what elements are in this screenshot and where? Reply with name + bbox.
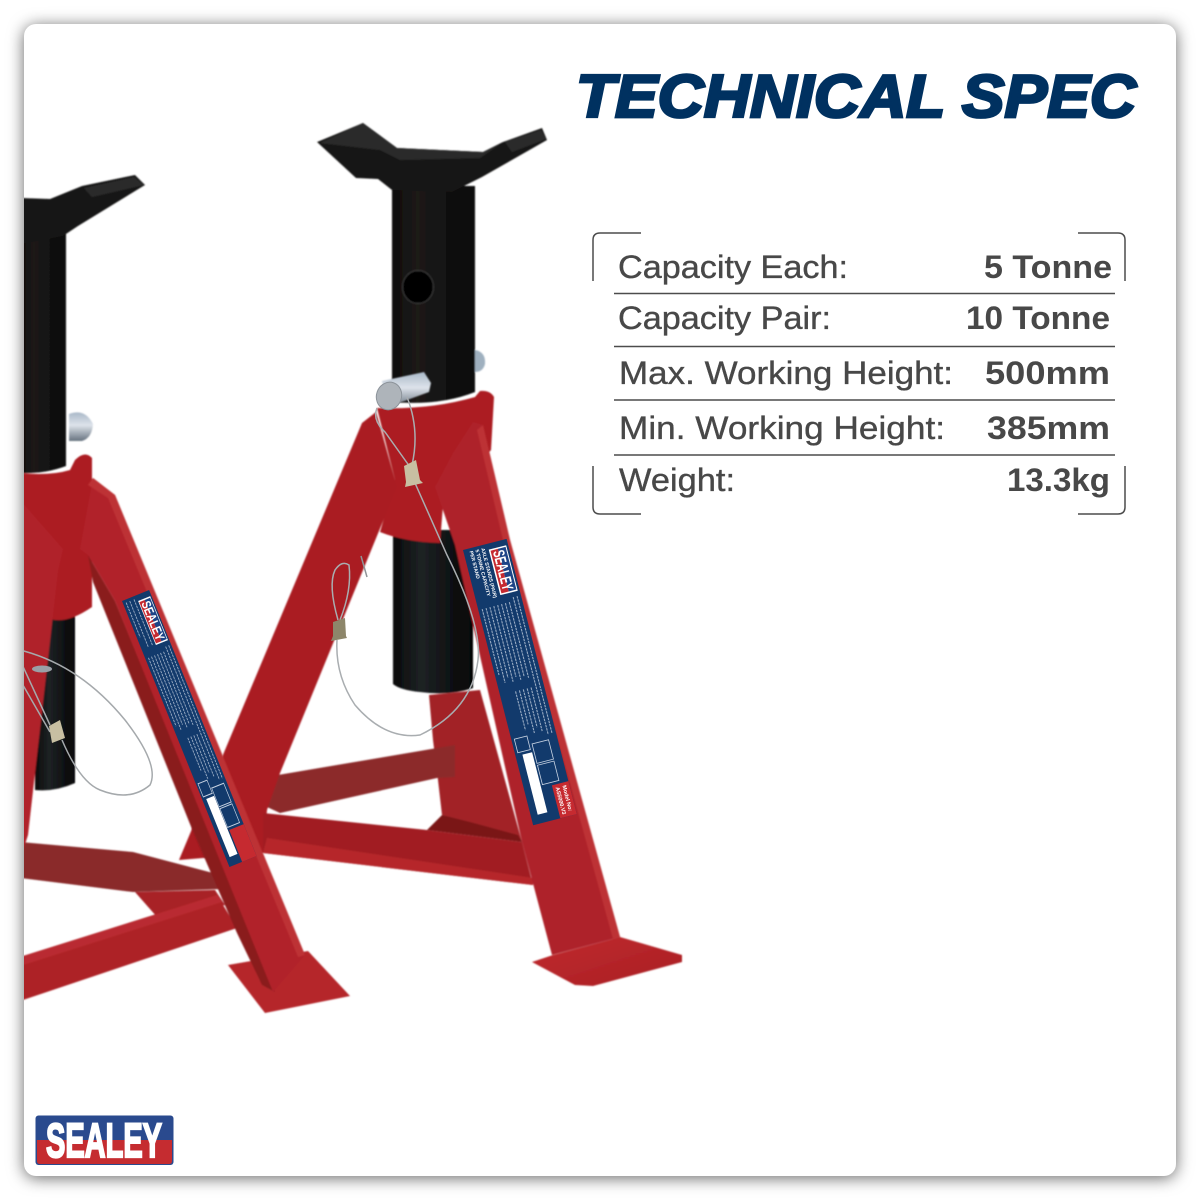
row: weight: Weight: — [619, 462, 735, 498]
label logo: SEALEY — [489, 548, 516, 593]
left leg stub — [24, 614, 54, 849]
lower bar — [24, 904, 236, 1001]
cable crimp — [404, 460, 423, 487]
foot plate — [532, 937, 682, 986]
label model box — [552, 781, 577, 818]
foot plate — [228, 951, 350, 1013]
collar — [20, 454, 92, 620]
product photo: two axle stands — [20, 123, 682, 1013]
label logo — [137, 596, 168, 645]
table frame brackets — [593, 233, 1125, 514]
saddle — [20, 175, 145, 244]
label icons — [198, 775, 240, 832]
lower crimp — [331, 618, 347, 641]
left axle stand — [20, 175, 350, 1013]
title: TECHNICAL SPEC — [576, 63, 1138, 130]
lower black column — [35, 610, 75, 790]
row: max working height: Max. Working Height: — [619, 355, 953, 391]
label heading: PER STAND — [468, 550, 481, 580]
row: capacity pair: 10 Tonne — [966, 300, 1110, 336]
logo: Sealey: SEALEY — [46, 1115, 162, 1168]
pin nub — [69, 412, 93, 441]
safety cable — [20, 650, 152, 795]
row: capacity each: Capacity Each: — [618, 249, 848, 285]
label model box: AS5000.V3 — [554, 787, 566, 815]
safety cable — [332, 397, 478, 736]
label heading: 5 TONNE CAPACITY — [473, 549, 491, 598]
front leg — [80, 478, 305, 992]
row dividers — [614, 294, 1115, 455]
row: min working height: Min. Working Height: — [619, 410, 945, 446]
warning label — [463, 539, 577, 825]
label logo — [488, 545, 518, 595]
row: capacity each — [618, 249, 1112, 285]
warning label — [122, 590, 257, 867]
label icons — [514, 736, 560, 786]
upper black column — [20, 232, 66, 473]
cable crimp — [49, 720, 65, 743]
pin end — [32, 666, 52, 672]
saddle — [317, 123, 547, 192]
front leg inner face — [88, 555, 275, 992]
row: max working height: 500mm — [985, 355, 1110, 391]
row: max working height — [619, 355, 1110, 391]
collar — [377, 391, 494, 543]
label model box: Model No: — [560, 785, 573, 812]
back bar — [267, 745, 455, 813]
row: min working height: 385mm — [987, 410, 1110, 446]
row: min working height — [619, 410, 1110, 446]
logo: Sealey — [36, 1115, 174, 1168]
label small print — [481, 596, 552, 743]
front bar — [263, 813, 533, 885]
label small print — [126, 594, 222, 787]
hole in column — [402, 270, 434, 304]
lower black column — [393, 530, 473, 693]
row: capacity pair — [618, 300, 1110, 336]
specification table — [593, 233, 1125, 514]
under piece — [135, 890, 225, 917]
upper black column — [392, 186, 475, 403]
row: capacity pair: Capacity Pair: — [618, 300, 831, 336]
left leg — [179, 412, 397, 860]
row: weight — [619, 462, 1110, 498]
pin far side — [475, 350, 485, 372]
rear strut — [429, 690, 522, 842]
upper back bar — [20, 842, 222, 892]
right axle stand — [179, 123, 682, 986]
row: weight: 13.3kg — [1007, 462, 1110, 498]
pin with cap — [372, 372, 431, 413]
row: capacity each: 5 Tonne — [984, 249, 1112, 285]
label logo: SEALEY — [138, 599, 167, 643]
label heading: AXLE STANDS (PAIR) — [479, 547, 498, 599]
front leg — [435, 422, 620, 955]
